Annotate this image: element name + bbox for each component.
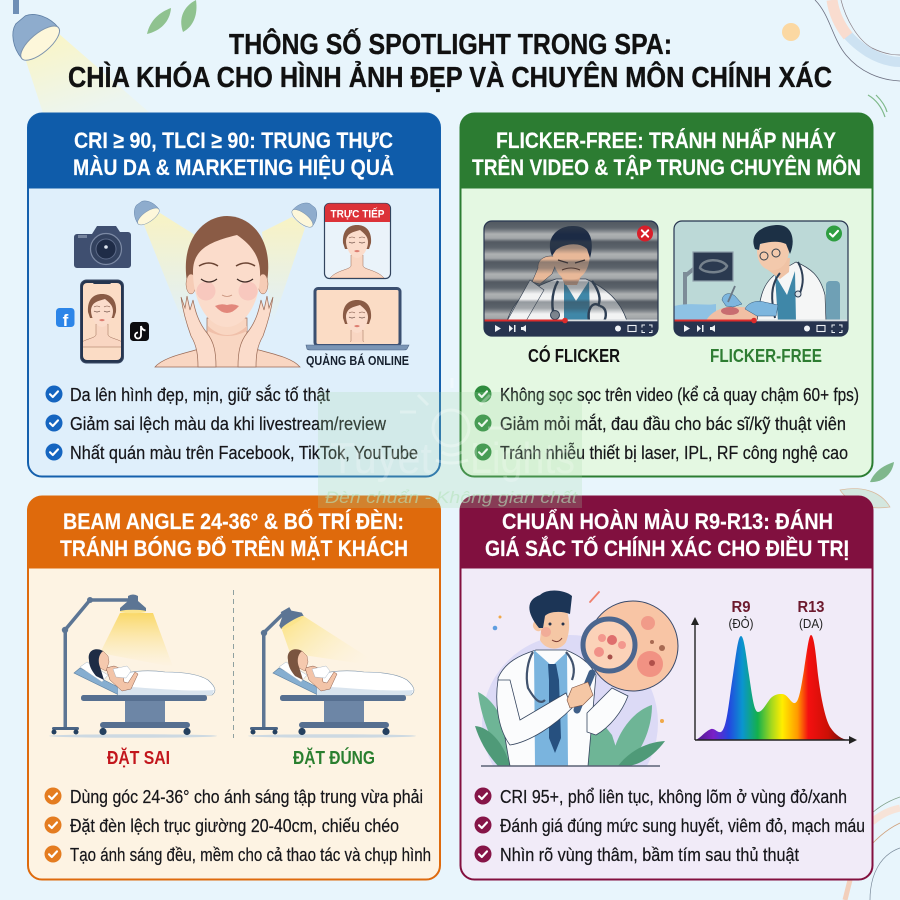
panel header: R9-R13 (460, 496, 872, 568)
bullet list: beam angle: Tạo ánh sáng đều, mềm cho cả thao tác và chụp hình (70, 844, 431, 865)
bullet list: beam angle: Đặt đèn lệch trục giường 20-40cm, chiếu chéo (70, 815, 399, 836)
bullet list: CRI: Giảm sai lệch màu da khi livestream/review (70, 413, 387, 434)
decoration: top-right curves (782, 0, 900, 117)
icon: livestream card (324, 204, 390, 278)
decoration: right leaf (870, 462, 894, 482)
icon: smartphone with portrait (80, 280, 124, 364)
icon: livestream card: TRỰC TIẾP (330, 208, 384, 220)
bullet list: R9-R13: CRI 95+, phổ liên tục, không lõm ở vùng đỏ/xanh (500, 786, 847, 807)
label: flicker free: FLICKER-FREE (710, 345, 822, 366)
icon: TikTok (130, 322, 149, 341)
panel header: CRI (28, 114, 440, 188)
decoration: bottom-right curves (845, 797, 900, 900)
panel: beam angle (28, 496, 440, 880)
chart: light spectrum: R13 (798, 599, 825, 616)
decoration: pale leaf behind panel (840, 489, 890, 508)
chart: light spectrum: R9 (732, 599, 751, 616)
icon: ceiling spotlight with beam (2, 0, 150, 113)
panel header: R9-R13: CHUẨN HOÀN MÀU R9-R13: ĐÁNH (502, 509, 833, 534)
illustration: face under two spotlights (129, 196, 322, 367)
bullet list: R9-R13 (474, 786, 865, 865)
icon: red cross badge (637, 226, 653, 242)
panel header: beam angle (28, 496, 440, 568)
icon: green check badge (826, 226, 842, 242)
watermark: Tuyet Lights: Đèn chuẩn - Không gian chất (325, 488, 578, 507)
chart: light spectrum: (ĐỎ) (728, 616, 754, 631)
panel header: beam angle: TRÁNH BÓNG ĐỔ TRÊN MẶT KHÁCH (60, 536, 408, 561)
illustration: doctor with magnifier (475, 590, 678, 767)
label: wrong placement: ĐẶT SAI (107, 747, 170, 768)
panel header: CRI: CRI ≥ 90, TLCI ≥ 90: TRUNG THỰC (74, 128, 393, 153)
chart: light spectrum (691, 599, 857, 744)
decoration: top-left leaves (147, 0, 196, 34)
label: correct placement: ĐẶT ĐÚNG (293, 747, 375, 768)
panel header: beam angle: BEAM ANGLE 24-36° & BỐ TRÍ ĐÈN: (63, 508, 404, 534)
bullet list: R9-R13: Nhìn rõ vùng thâm, bầm tím sau thủ thuật (500, 844, 799, 865)
title (68, 28, 832, 94)
panel header: flicker free (460, 114, 872, 188)
bullet list: beam angle (44, 786, 431, 865)
bullet list: flicker: Tránh nhiễu thiết bị laser, IPL, RF công nghệ cao (500, 442, 848, 463)
panel header: flicker free: FLICKER-FREE: TRÁNH NHẤP NHÁY (496, 128, 836, 153)
panel: flicker free (460, 114, 872, 476)
panel header: R9-R13: GIÁ SẮC TỐ CHÍNH XÁC CHO ĐIỀU TRỊ (485, 535, 849, 561)
watermark: Tuyet Lights: Tuyet (330, 434, 432, 483)
watermark: Tuyet Lights: Lights (470, 434, 575, 483)
divider between placements (232, 590, 234, 738)
bullet list: flicker (474, 384, 859, 463)
bullet list: CRI: Nhất quán màu trên Facebook, TikTok, YouTube (70, 442, 418, 463)
bullet list: CRI: Da lên hình đẹp, mịn, giữ sắc tố thật (70, 384, 330, 405)
bullet list: beam angle: Dùng góc 24-36° cho ánh sáng tập trung vừa phải (70, 786, 423, 807)
panel: CRI and TLCI (28, 114, 440, 476)
icon: Facebook: f (63, 311, 69, 330)
icon: camera (74, 226, 131, 268)
label: online promotion: QUẢNG BÁ ONLINE (306, 353, 409, 368)
illustration: wrong lamp placement (49, 594, 217, 738)
panel: color rendering R9-R13 (460, 496, 872, 880)
label: with flicker: CÓ FLICKER (528, 345, 620, 366)
bullet list: CRI (46, 384, 418, 463)
video frame: flicker-free footage (674, 221, 848, 336)
icon: Facebook (56, 308, 74, 330)
title: THÔNG SỐ SPOTLIGHT TRONG SPA: (229, 28, 672, 61)
watermark: Tuyet Lights (318, 378, 582, 508)
panel header: CRI: MÀU DA & MARKETING HIỆU QUẢ (73, 155, 394, 180)
video frame: flickering footage (484, 221, 658, 336)
chart: light spectrum: (DA) (799, 616, 823, 631)
bullet list: flicker: Giảm mỏi mắt, đau đầu cho bác sĩ/kỹ thuật viên (500, 413, 846, 434)
illustration: correct lamp placement (248, 603, 416, 738)
icon: laptop with portrait (306, 288, 409, 353)
